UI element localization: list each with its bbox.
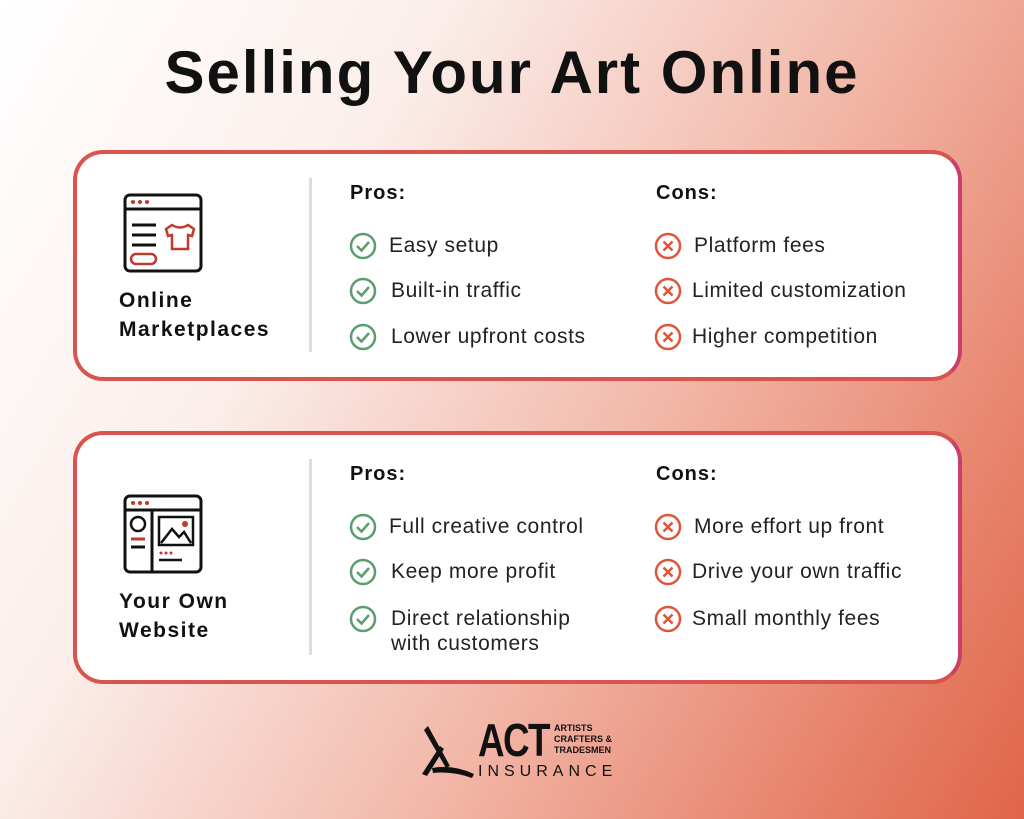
cons heading: Cons: <box>656 463 718 485</box>
label: Online Marketplaces: Online <box>119 289 193 312</box>
label: Your Own Website: Website <box>119 619 210 642</box>
panel: online marketplaces <box>73 150 962 381</box>
logo small text: CRAFTERS & <box>554 734 612 744</box>
label: Online Marketplaces <box>119 289 270 341</box>
icon: website window <box>124 494 202 574</box>
pros list: Built-in traffic <box>391 279 522 302</box>
logo: ACT Insurance <box>422 714 617 780</box>
pros list <box>350 232 586 350</box>
pros list: Full creative control <box>389 515 584 538</box>
cons list: More effort up front <box>694 515 884 538</box>
pros list: Keep more profit <box>391 560 556 583</box>
cons list: Platform fees <box>694 234 826 257</box>
cons list: Drive your own traffic <box>692 560 902 583</box>
pros list: with customers <box>391 632 539 655</box>
logo INSURANCE: INSURANCE <box>478 763 617 780</box>
logo small text: ARTISTS <box>554 723 593 733</box>
label: Your Own Website <box>119 590 229 642</box>
pros list <box>350 514 584 655</box>
cons list: Limited customization <box>692 279 907 302</box>
cons list <box>654 514 902 632</box>
cons list: Small monthly fees <box>692 607 880 630</box>
icon: brush strokes <box>422 726 474 778</box>
cons heading: Cons: <box>656 182 718 204</box>
pros heading: Pros: <box>350 463 406 485</box>
pros list: Direct relationship <box>391 607 570 630</box>
pros heading: Pros: <box>350 182 406 204</box>
icon: marketplace window <box>124 194 202 272</box>
title: Selling Your Art Online <box>165 39 859 106</box>
logo small text <box>554 723 612 755</box>
label: Online Marketplaces: Marketplaces <box>119 318 270 341</box>
label: Your Own Website: Your Own <box>119 590 229 613</box>
cons list <box>654 232 907 350</box>
logo small text: TRADESMEN <box>554 745 611 755</box>
panel: your own website <box>73 431 962 684</box>
logo text ACT: ACT <box>478 714 549 766</box>
pros list: Easy setup <box>389 234 499 257</box>
cons list: Higher competition <box>692 325 878 348</box>
pros list: Lower upfront costs <box>391 325 586 348</box>
